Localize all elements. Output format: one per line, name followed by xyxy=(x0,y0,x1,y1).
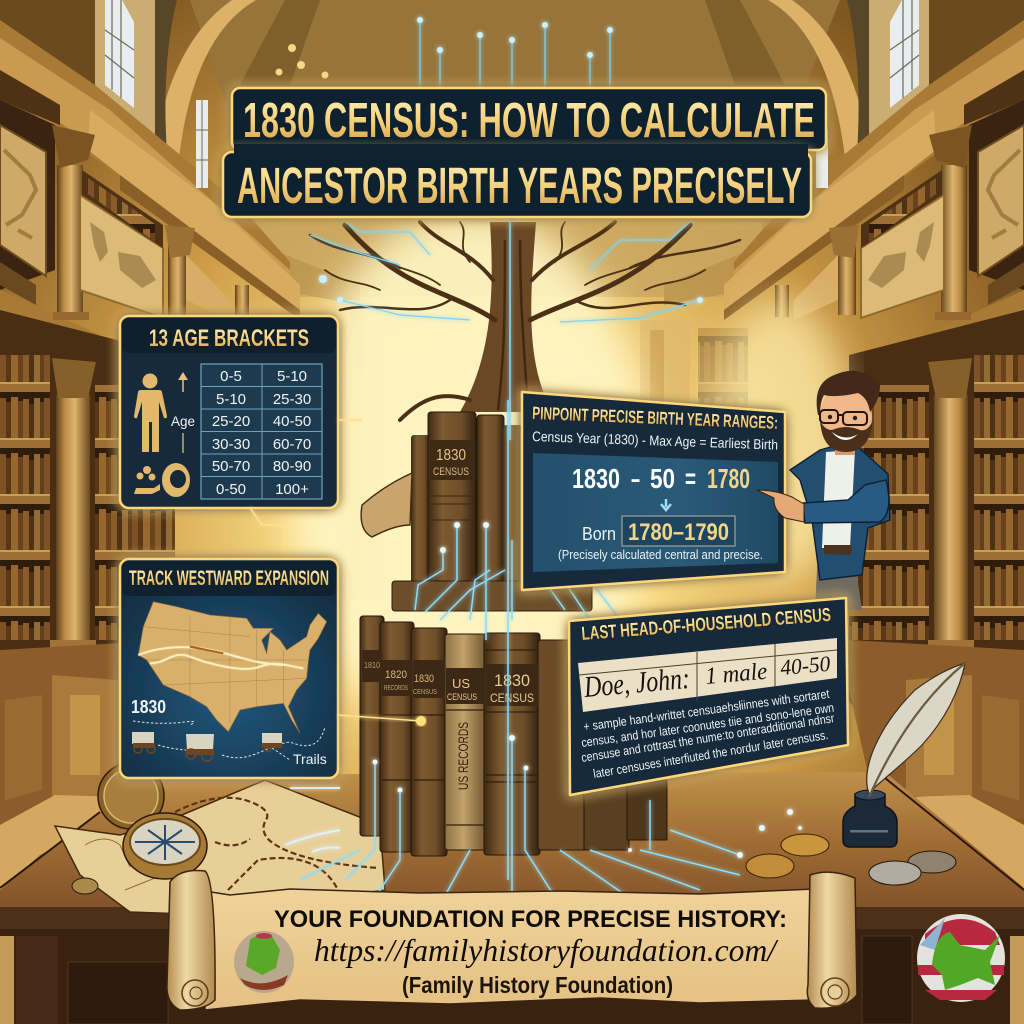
left windows xyxy=(105,0,208,188)
scroll left roll xyxy=(167,870,215,1010)
age bracket table: 100+ xyxy=(275,481,309,498)
lower row of book spines: 1830 xyxy=(414,673,434,685)
central architecture xyxy=(250,222,774,600)
icon: age arrow xyxy=(171,372,195,453)
calculation box: 1830 xyxy=(572,463,620,494)
age bracket table: 0-50 xyxy=(216,481,246,498)
age bracket table: 5-10 xyxy=(216,391,246,408)
banner line 1 xyxy=(232,88,826,150)
handwritten census sample: 1 male xyxy=(704,659,769,690)
logo: lion roundel xyxy=(917,914,1005,1002)
banner seam cover xyxy=(234,144,808,158)
upper book stack xyxy=(361,412,592,611)
panel heading: 13 AGE BRACKETS xyxy=(149,325,309,352)
calculation box xyxy=(533,453,778,572)
icon: standing person xyxy=(134,374,167,452)
panel heading: TRACK WESTWARD EXPANSION xyxy=(129,567,329,590)
calculation box: (Precisely calculated central and precise. xyxy=(558,547,763,562)
central glow xyxy=(290,210,650,750)
age bracket table: 50-70 xyxy=(212,458,250,475)
sample description: later censuses interfiuted the nordur later censuss. xyxy=(592,728,829,781)
lower row of book spines xyxy=(360,616,667,856)
calculation box: 50 xyxy=(650,463,675,494)
calculation box: 1780–1790 xyxy=(628,519,729,546)
lower row of book spines: US RECORDS xyxy=(455,722,471,790)
feather quill xyxy=(867,663,965,797)
icon: down arrow xyxy=(661,499,671,510)
blue glowing circuit roots over the books xyxy=(285,222,802,1000)
right windows xyxy=(816,0,919,188)
compass xyxy=(98,763,207,879)
upper book stack: CENSUS xyxy=(433,466,469,478)
lower row of book spines: 1830 xyxy=(494,671,530,690)
icon: age arrow: Age xyxy=(171,414,195,429)
handwritten census sample xyxy=(578,638,837,712)
calculation box: Born xyxy=(582,524,616,544)
central stack of census books xyxy=(360,412,667,856)
logo small oval xyxy=(234,931,294,993)
panel heading: LAST HEAD-OF-HOUSEHOLD CENSUS xyxy=(581,605,832,645)
scroll banner: (Family History Foundation) xyxy=(402,972,673,998)
panel: 13 age brackets xyxy=(120,316,338,508)
age bracket table: 25-20 xyxy=(212,413,250,430)
sample description xyxy=(580,687,835,781)
icon: family and ancestor badges xyxy=(134,463,190,497)
calculation box: = xyxy=(685,463,696,494)
title banner xyxy=(223,88,826,217)
banner line 2 xyxy=(223,152,811,217)
right wall with shelves, maps and columns xyxy=(724,0,1024,890)
lower row of book spines: 1820 xyxy=(385,669,407,681)
ceiling vault xyxy=(150,0,874,190)
parchment scrap on upper books xyxy=(361,473,412,537)
antique map on the desk xyxy=(55,780,385,915)
icon: covered wagons xyxy=(132,732,282,761)
lower row of book spines: CENSUS xyxy=(490,691,534,705)
blue circuit lines in the ceiling and branches xyxy=(310,17,703,322)
lower row of book spines: RECORDS xyxy=(384,683,408,692)
lower row of book spines: CENSUS xyxy=(413,687,437,696)
handwritten census sample: Doe, John: xyxy=(582,662,691,704)
dashed trails xyxy=(133,721,325,760)
age bracket table: 60-70 xyxy=(273,436,311,453)
ink bottle xyxy=(843,790,897,847)
panel: track westward expansion xyxy=(120,559,338,778)
panel heading: PINPOINT PRECISE BIRTH YEAR RANGES: xyxy=(532,403,778,433)
sample description: + sample hand-writtet censuaehsłiinnes with sortaret xyxy=(583,687,831,734)
scroll right roll xyxy=(807,872,857,1008)
face xyxy=(835,435,855,455)
tree with branches and roots xyxy=(310,222,740,420)
panel: last head-of-household census xyxy=(569,598,848,795)
age bracket table: 5-10 xyxy=(277,368,307,385)
US map with trails xyxy=(138,602,327,733)
age bracket table: 0-5 xyxy=(220,368,242,385)
calculation box: – xyxy=(631,463,640,494)
upper book stack: 1830 xyxy=(436,447,466,464)
age bracket table: 30-30 xyxy=(212,436,250,453)
connector from age panel xyxy=(250,420,362,560)
handwritten census sample: 40-50 xyxy=(779,651,831,680)
scroll banner: https://familyhistoryfoundation.com/ xyxy=(314,932,779,968)
trails label: Trails xyxy=(293,751,327,767)
spine labels xyxy=(362,650,382,682)
year label: 1830 xyxy=(131,697,166,717)
desk xyxy=(0,772,1024,1024)
lower row of book spines: US xyxy=(452,676,470,691)
calculation box: 1780 xyxy=(707,463,750,494)
coins xyxy=(72,834,956,894)
sample description: censuse and rottrast the nume:to onteradditional ndnsr xyxy=(580,711,835,765)
connector to books xyxy=(338,715,426,726)
scroll text: YOUR FOUNDATION FOR PRECISE HISTORY: xyxy=(274,906,787,933)
hand xyxy=(757,490,804,522)
lower row of book spines: CENSUS xyxy=(447,692,477,702)
lower row of book spines: 1810 xyxy=(364,661,380,670)
jacket and shirt xyxy=(790,445,890,580)
panel: pinpoint precise birth year ranges xyxy=(522,392,785,590)
sample description: census, and hor later coonutes tiie and sono-lene own xyxy=(580,701,835,750)
formula caption: Census Year (1830) - Max Age = Earliest Birth xyxy=(532,428,778,453)
age bracket table xyxy=(201,364,322,499)
age bracket table: 80-90 xyxy=(273,458,311,475)
left wall with shelves, maps and columns xyxy=(0,0,300,890)
age bracket table: 40-50 xyxy=(273,413,311,430)
man pointing at the formula xyxy=(757,371,890,610)
age bracket table: 25-30 xyxy=(273,391,311,408)
scroll banner xyxy=(167,870,857,1010)
